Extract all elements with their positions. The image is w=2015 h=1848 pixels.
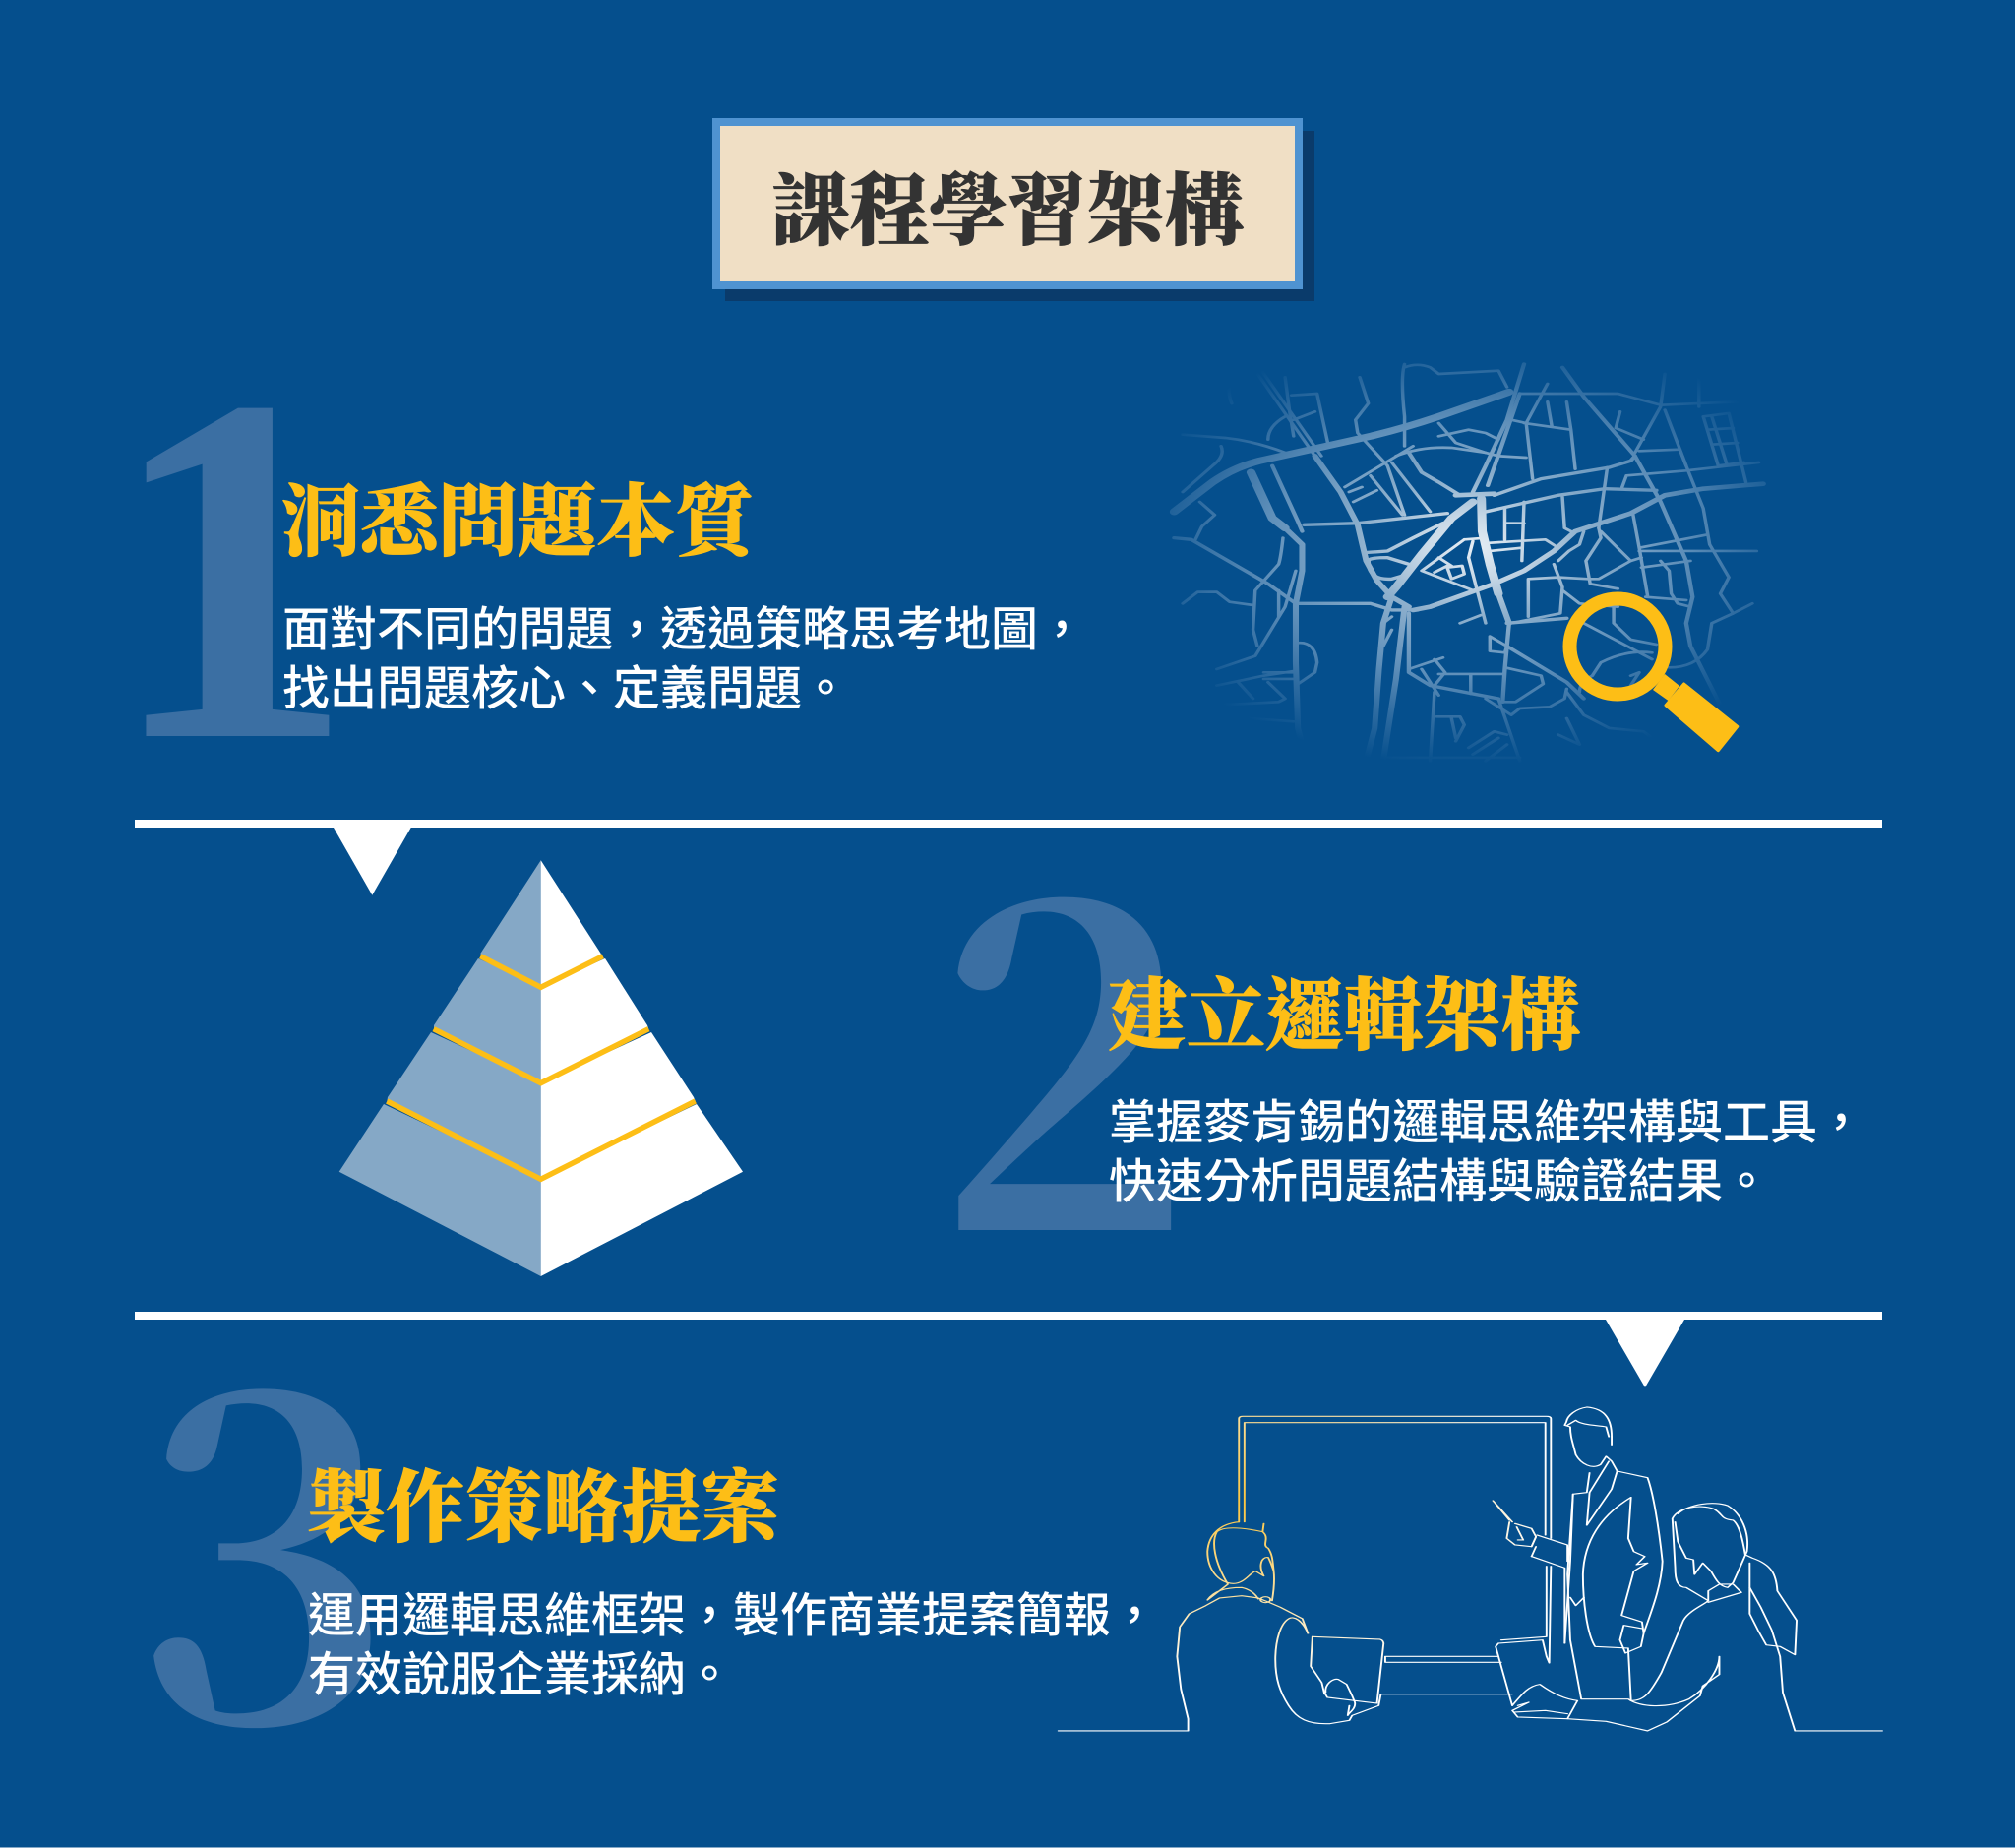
section 3 numeral: 3: [135, 1216, 395, 1847]
title text: 課程學習架構: [771, 169, 1244, 256]
icon: magnifying glass: [1570, 598, 1738, 751]
bottom edge line: [0, 1847, 2015, 1848]
street map illustration: [1174, 364, 1763, 761]
title box: [712, 118, 1314, 301]
presenter: [1493, 1407, 1719, 1731]
divider with pointer 1: [135, 820, 1882, 895]
section 2 body text: 掌握麥肯錫的邏輯思維架構與工具，: [1109, 1097, 1864, 1149]
section 3 body text: 運用邏輯思維框架，製作商業提案簡報，: [308, 1590, 1158, 1642]
pyramid illustration: [339, 860, 743, 1276]
seated woman: [1673, 1504, 1882, 1731]
section 3 body text: [308, 1590, 1158, 1701]
section 2 body text: [1109, 1097, 1864, 1208]
section 1 body text: [282, 604, 1085, 715]
section 2 numeral: 2: [932, 724, 1193, 1356]
section 1 numeral: 1: [106, 294, 354, 844]
section 1 heading: 洞悉問題本質: [281, 480, 765, 567]
section 2 heading: 建立邏輯架構: [1108, 974, 1580, 1061]
pyramid gold level lines: [387, 956, 696, 1179]
section 1 body text: 找出問題核心、定義問題。: [282, 663, 849, 715]
whiteboard: [1239, 1416, 1551, 1705]
section 1 body text: 面對不同的問題，透過策略思考地圖，: [282, 604, 1085, 656]
seated man: [1059, 1522, 1383, 1731]
section 3 heading: 製作策略提案: [307, 1465, 780, 1553]
section 2 body text: 快速分析問題結構與驗證結果。: [1109, 1156, 1770, 1208]
line art: presentation meeting: [1059, 1407, 1882, 1731]
section 3 body text: 有效說服企業採納。: [308, 1649, 733, 1701]
laptop and hands: [1512, 1685, 1577, 1719]
divider with pointer 2: [135, 1312, 1882, 1387]
